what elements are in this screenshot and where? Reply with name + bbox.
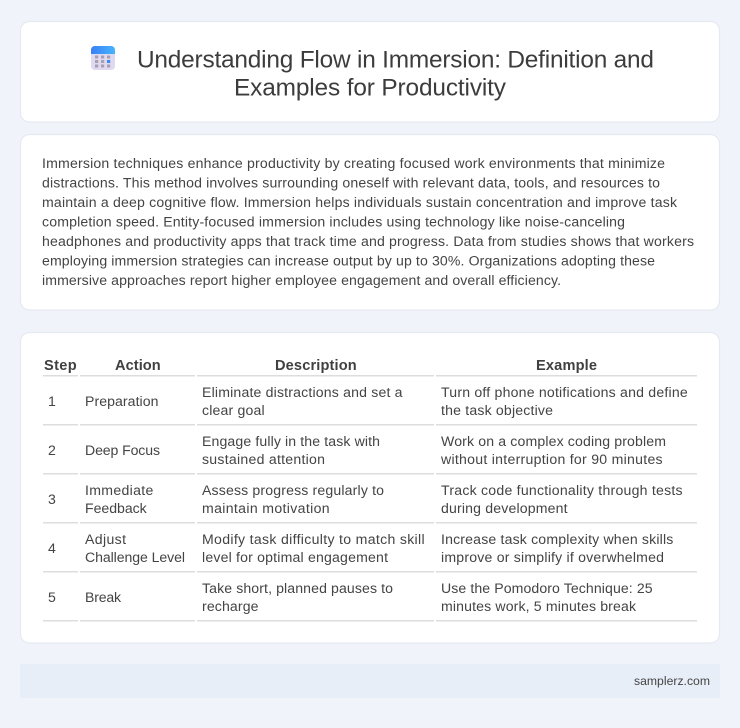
text block: introduction paragraph: headphones and productivity apps that track time and progress. Data from studies shows that workers [42, 233, 694, 249]
table row 1: Preparation: Preparation [85, 393, 158, 409]
table row 1: Preparation: clear goal [202, 402, 265, 418]
footer: samplerz.com [634, 674, 710, 688]
table row 4: Adjust Challenge Level: Increase task complexity when skills [441, 531, 673, 547]
table row 4: Adjust Challenge Level: improve or simplify if overwhelmed [441, 549, 664, 565]
panel: title card [20, 22, 720, 122]
table row 4: Adjust Challenge Level: Adjust [85, 531, 126, 547]
table row 1: Preparation: Turn off phone notifications and define [441, 384, 688, 400]
panel: introduction [20, 134, 720, 310]
table row 1: Preparation: 1 [48, 393, 56, 409]
table row 2: Deep Focus: Work on a complex coding problem [441, 433, 666, 449]
table row 5: Break: Take short, planned pauses to [202, 580, 393, 596]
text block: introduction paragraph: completion speed. Entity-focused immersion includes using technology like noise-canceling [42, 214, 625, 230]
table row 2: Deep Focus: Deep Focus [85, 442, 160, 458]
icon: calendar [91, 46, 115, 70]
table row 1: Preparation: Eliminate distractions and set a [202, 384, 403, 400]
table row 3: Immediate Feedback [43, 482, 697, 524]
table row 4: Adjust Challenge Level [43, 531, 697, 572]
table row 4: Adjust Challenge Level: level for optimal engagement [202, 549, 388, 565]
table row 2: Deep Focus: sustained attention [202, 451, 325, 467]
table row 1: Preparation [43, 384, 697, 426]
table row 4: Adjust Challenge Level: Modify task difficulty to match skill [202, 531, 425, 547]
table row 4: Adjust Challenge Level: Challenge Level [85, 549, 185, 565]
table row 3: Immediate Feedback: maintain motivation [202, 500, 330, 516]
table row 5: Break: minutes work, 5 minutes break [441, 598, 637, 614]
table row 3: Immediate Feedback: Immediate [85, 482, 153, 498]
title: Examples for Productivity [234, 74, 507, 102]
table header: Description [275, 358, 357, 374]
table row 5: Break: recharge [202, 598, 259, 614]
text block: introduction paragraph: employing immersion strategies can increase output by up to 30%. Organizations adopting these [42, 252, 655, 268]
table row 5: Break: Break [85, 589, 122, 605]
table row 5: Break [43, 580, 697, 622]
table row 2: Deep Focus: without interruption for 90 minutes [440, 451, 663, 467]
table row 3: Immediate Feedback: 3 [48, 491, 56, 507]
panel: steps table [20, 332, 720, 643]
table row 3: Immediate Feedback: Assess progress regularly to [202, 482, 384, 498]
text block: introduction paragraph: maintain a deep cognitive flow. Immersion helps individuals sustain concentration and improve task [42, 194, 678, 210]
text block: introduction paragraph: immersive approaches report higher employee engagement and overall efficiency. [42, 272, 561, 288]
table header: Example [536, 358, 597, 374]
text block: introduction paragraph: Immersion techniques enhance productivity by creating focused work environments that minimize [42, 155, 665, 171]
table row 5: Break: 5 [48, 589, 56, 605]
table row 3: Immediate Feedback: Track code functionality through tests [441, 482, 683, 498]
table header: Action [115, 358, 161, 374]
text block: introduction paragraph: distractions. This method involves surrounding oneself with relevant data, tools, and resources to [42, 174, 660, 190]
table row 3: Immediate Feedback: Feedback [85, 500, 148, 516]
text block: introduction paragraph [42, 155, 694, 288]
table row 3: Immediate Feedback: during development [441, 500, 568, 516]
footer [20, 664, 720, 698]
title [137, 46, 654, 102]
table row 2: Deep Focus: 2 [48, 442, 56, 458]
table row 4: Adjust Challenge Level: 4 [48, 540, 56, 556]
table row 2: Deep Focus: Engage fully in the task with [202, 433, 380, 449]
table row 5: Break: Use the Pomodoro Technique: 25 [441, 580, 653, 596]
table header: Step [44, 358, 77, 374]
table row 1: Preparation: the task objective [441, 402, 553, 418]
table header [43, 358, 697, 376]
table row 2: Deep Focus [43, 433, 697, 474]
title: Understanding Flow in Immersion: Definition and [137, 46, 654, 74]
